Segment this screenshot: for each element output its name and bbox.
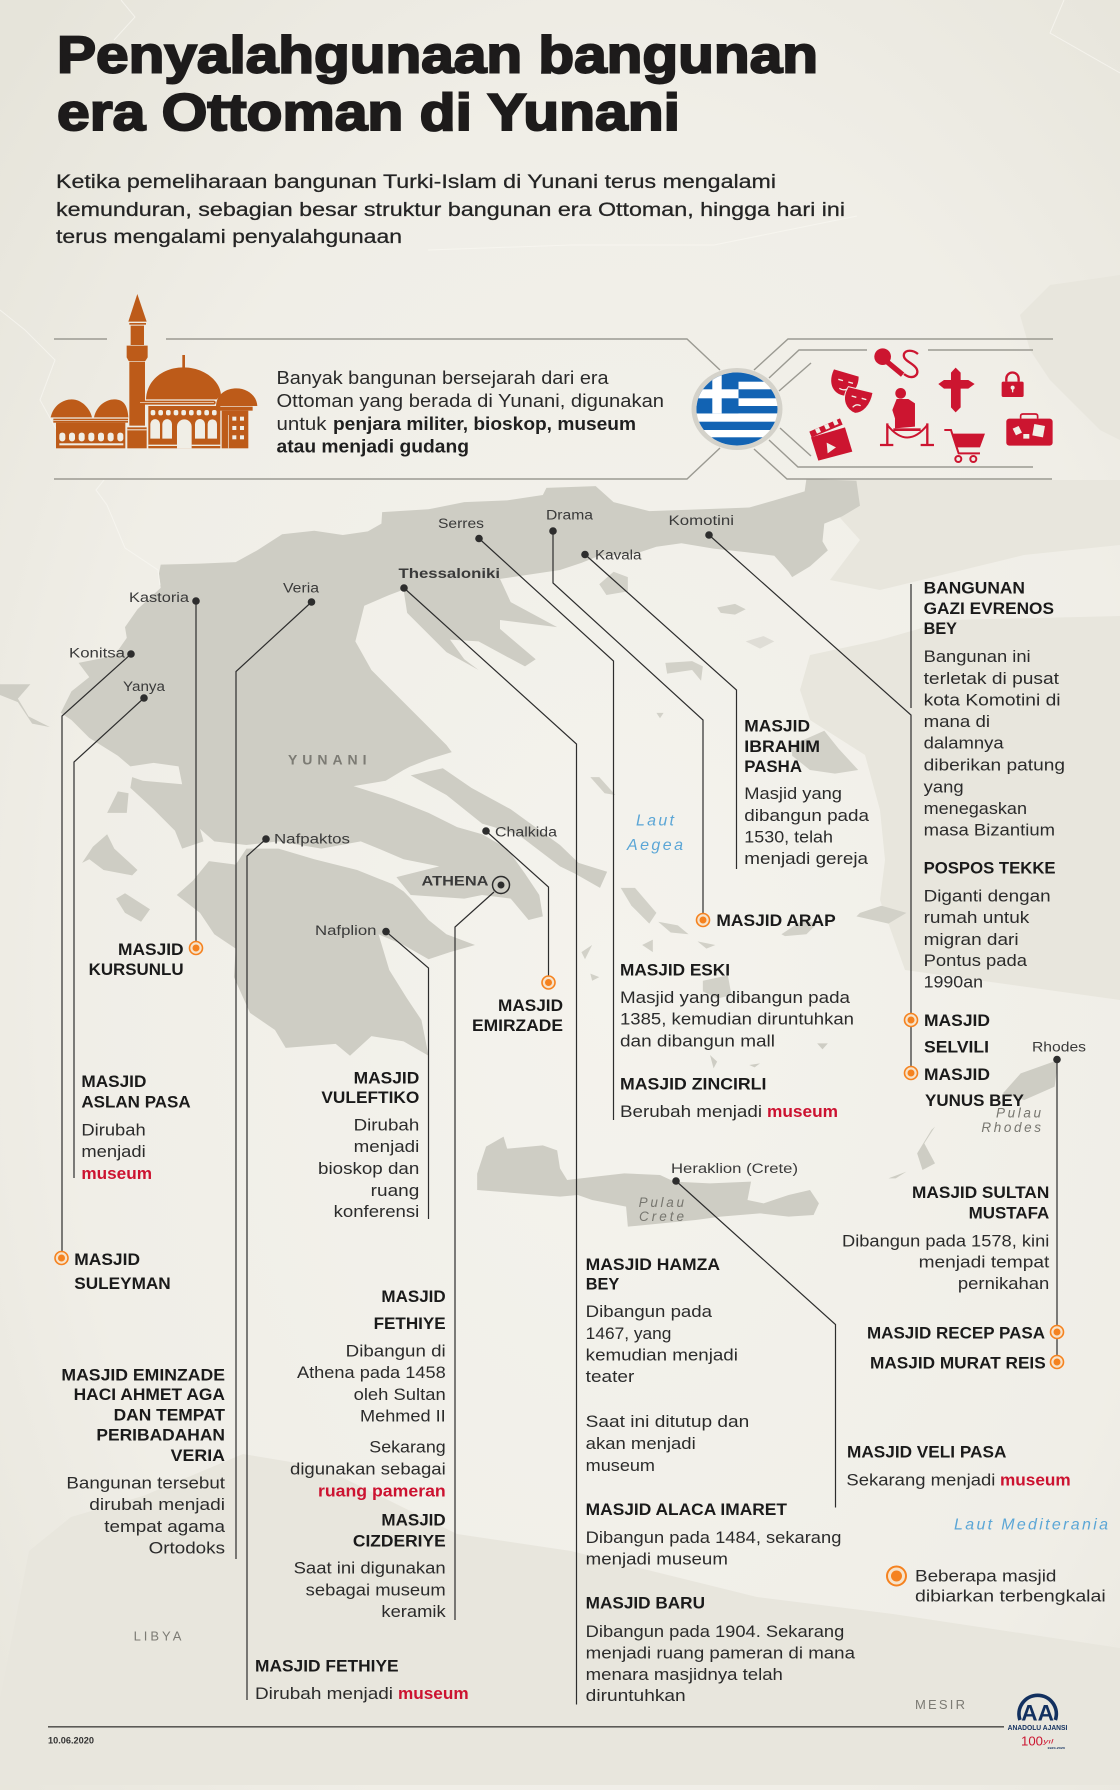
- text: Masjid Vuleftiko: ruang: [371, 1181, 419, 1200]
- text: Masjid Kursunlu: KURSUNLU: [89, 961, 184, 979]
- icon: microphone: [874, 348, 918, 377]
- text: Bangunan Gazi Evrenos Bey: dalamnya: [924, 734, 1004, 753]
- place names on the map: Yanya: [123, 679, 166, 694]
- text: Bangunan Gazi Evrenos Bey: diberikan patung: [924, 756, 1065, 774]
- intro text block: Ottoman yang berada di Yunani, digunakan: [276, 391, 664, 411]
- text: Masjid Veli Pasa: MASJID VELI PASA: [847, 1444, 1006, 1462]
- place names on the map: Nafpaktos: [274, 832, 350, 847]
- sea labels: Laut Mediterania: [954, 1516, 1108, 1534]
- text: Masjid Cizderiye: MASJID: [381, 1512, 446, 1530]
- text: Masjid Suleyman: [74, 1251, 171, 1293]
- text: Masjid Veli Pasa: museum: [1000, 1470, 1071, 1489]
- icon: theatre masks: [831, 369, 873, 413]
- text: Bangunan Gazi Evrenos Bey: mana di: [924, 712, 990, 731]
- text: Pospos Tekke: Pontus pada: [924, 951, 1028, 970]
- icons: misuse of buildings: [809, 348, 1053, 462]
- legend: neglected mosques: dibiarkan terbengkalai: [915, 1586, 1106, 1606]
- text: Masjid Zincirli: [620, 1076, 838, 1121]
- text: Masjid Eminzade: tempat agama: [104, 1517, 226, 1536]
- place names on the map: Nafplion: [315, 923, 376, 938]
- text: Masjid Fethiye Athena: Athena pada 1458: [297, 1363, 446, 1382]
- leader lines and city markers: [62, 527, 1061, 1705]
- text: Masjid Suleyman: SULEYMAN: [74, 1275, 171, 1293]
- text: Masjid Vuleftiko: menjadi: [354, 1137, 419, 1156]
- text: Masjid Hamza Bey: Saat ini ditutup dan: [586, 1412, 749, 1431]
- leader: Kastoria: [192, 597, 200, 948]
- text: Masjid Hamza Bey: [586, 1256, 749, 1475]
- leader: Chalkida: [482, 827, 548, 982]
- leader: Komotini: [705, 531, 911, 1073]
- place names on the map: Rhodes: [981, 1120, 1041, 1135]
- text: Bangunan Gazi Evrenos Bey: BEY: [924, 620, 957, 638]
- logo: Anadolu Ajansi: ANADOLU AJANSI: [1008, 1725, 1067, 1732]
- place names on the map: Kastoria: [129, 590, 190, 605]
- map: mainland Greece and western islands: [0, 479, 860, 1056]
- text: Masjid Vuleftiko: Dirubah: [354, 1115, 419, 1134]
- text: Masjid Sultan Mustafa: [842, 1184, 1050, 1293]
- text: Masjid Veli Pasa: [846, 1444, 1071, 1489]
- icon: shopping cart: [944, 430, 985, 462]
- footer rule and date: 10.06.2020: [48, 1736, 94, 1746]
- text: Masjid Alaca Imaret: [586, 1501, 841, 1568]
- text: Masjid Ibrahim Pasha: [744, 717, 870, 868]
- logo: Anadolu Ajansi: AA: [1021, 1700, 1054, 1725]
- text: Masjid Eski: MASJID ESKI: [620, 962, 730, 980]
- map: Crete, Rhodes and Dodecanese: [477, 1043, 1058, 1227]
- text: Masjid Fethiye Athena: Sekarang: [369, 1438, 446, 1456]
- leader: Rhodes: [1053, 1056, 1061, 1362]
- intro text block: Banyak bangunan bersejarah dari era: [276, 368, 610, 388]
- place names on the map: Heraklion (Crete): [671, 1161, 798, 1176]
- text: Masjid Hamza Bey: kemudian menjadi: [586, 1345, 738, 1364]
- intro text block: atau menjadi gudang: [276, 437, 469, 457]
- title: era Ottoman di Yunani: [57, 84, 680, 142]
- text: Masjid Veli Pasa: Sekarang menjadi: [846, 1470, 995, 1489]
- sea labels: Aegea: [626, 837, 683, 854]
- legend: neglected mosques: [887, 1566, 1106, 1606]
- text: Masjid Hamza Bey: 1467, yang: [586, 1324, 671, 1343]
- text: Masjid Zincirli: MASJID ZINCIRLI: [620, 1076, 766, 1094]
- text: Masjid Recep Pasa: MASJID RECEP PASA: [867, 1324, 1045, 1342]
- text: Pospos Tekke: Diganti dengan: [924, 886, 1051, 905]
- icon: clapperboard: [809, 418, 852, 461]
- text: Masjid Ibrahim Pasha: menjadi gereja: [744, 849, 869, 868]
- text: Masjid Fethiye Veria: Dirubah menjadi: [255, 1684, 393, 1703]
- text: Bangunan Gazi Evrenos Bey: BANGUNAN: [924, 580, 1025, 598]
- text: Masjid Hamza Bey: Dibangun pada: [586, 1302, 713, 1321]
- text: Masjid Fethiye Athena: Mehmed II: [360, 1406, 446, 1425]
- leader: Nafpaktos: [247, 835, 270, 1700]
- leader: Yanya: [74, 694, 148, 1178]
- text: Masjid Selvili: SELVILI: [924, 1038, 989, 1056]
- text: Masjid Cizderiye: CIZDERIYE: [353, 1532, 446, 1550]
- text: Pospos Tekke: migran dari: [924, 930, 1019, 949]
- leader: Nafplion: [382, 928, 428, 1219]
- subtitle text block: terus mengalami penyalahgunaan: [56, 227, 402, 248]
- place names on the map: Serres: [438, 516, 484, 531]
- title: [57, 26, 818, 142]
- map: Aegean islands: [581, 572, 906, 999]
- text: Masjid Baru: [586, 1595, 856, 1705]
- place names on the map: Pulau: [996, 1106, 1041, 1121]
- icon: cross: [938, 368, 975, 412]
- text: Masjid Selvili: MASJID: [924, 1012, 990, 1030]
- text: Masjid Vuleftiko: konferensi: [334, 1202, 419, 1221]
- text: Masjid Alaca Imaret: menjadi museum: [586, 1549, 728, 1568]
- place names on the map: Drama: [546, 508, 594, 522]
- text: Masjid Emirzade: [472, 997, 563, 1035]
- text: Masjid Cizderiye: [294, 1512, 446, 1621]
- text: Masjid Sultan Mustafa: MASJID SULTAN: [912, 1184, 1049, 1202]
- subtitle text block: kemunduran, sebagian besar struktur bangunan era Ottoman, hingga hari ini: [56, 200, 845, 221]
- text: Masjid Eminzade: Bangunan tersebut: [66, 1474, 225, 1493]
- place names on the map: Crete: [639, 1209, 684, 1224]
- logo: Anadolu Ajansi: 1920-2020: [1047, 1746, 1065, 1750]
- text: Masjid Baru: menara masjidnya telah: [586, 1665, 783, 1684]
- text: Masjid Eminzade: dirubah menjadi: [89, 1495, 225, 1514]
- place names on the map: ATHENA: [422, 872, 488, 888]
- text: Masjid Fethiye Athena: [290, 1288, 446, 1500]
- text: Masjid Baru: MASJID BARU: [586, 1595, 705, 1613]
- intro text block: untuk: [276, 414, 328, 434]
- text: Masjid Emirzade: EMIRZADE: [472, 1017, 563, 1035]
- text: Bangunan Gazi Evrenos Bey: terletak di pusat: [924, 669, 1059, 688]
- place names on the map: Pulau: [639, 1195, 684, 1210]
- text: Masjid Aslan Pasa: ASLAN PASA: [81, 1094, 191, 1112]
- text: Bangunan Gazi Evrenos Bey: [924, 580, 1065, 839]
- text: Masjid Fethiye Athena: FETHIYE: [374, 1315, 446, 1333]
- text: Pospos Tekke: [924, 860, 1056, 992]
- intro text block: penjara militer, bioskop, museum: [333, 414, 636, 434]
- place names on the map: Kavala: [595, 548, 642, 562]
- leader: Serres: [475, 535, 614, 1120]
- text: Masjid Hamza Bey: MASJID HAMZA: [586, 1256, 720, 1274]
- text: Masjid Yunus Bey: MASJID: [924, 1066, 990, 1084]
- place names on the map: YUNANI: [288, 752, 366, 768]
- text: Masjid Ibrahim Pasha: IBRAHIM: [744, 738, 820, 756]
- place names on the map: Thessaloniki: [398, 565, 500, 581]
- title: Penyalahgunaan bangunan: [57, 26, 818, 84]
- leader: Drama: [549, 527, 703, 920]
- text: Masjid Ibrahim Pasha: MASJID: [744, 717, 810, 735]
- text: Masjid Fethiye Athena: ruang pameran: [318, 1481, 446, 1500]
- place names on the map: Chalkida: [495, 824, 558, 839]
- text: Masjid Aslan Pasa: menjadi: [81, 1142, 146, 1161]
- icon: statue behind rope: [880, 388, 934, 445]
- text: Masjid Vuleftiko: [318, 1070, 419, 1221]
- place names on the map: Rhodes: [1032, 1040, 1086, 1054]
- text: Masjid Fethiye Veria: museum: [398, 1684, 469, 1703]
- text: Bangunan Gazi Evrenos Bey: yang: [924, 777, 964, 796]
- place names on the map: [69, 508, 1086, 1712]
- text: Bangunan Gazi Evrenos Bey: masa Bizantium: [924, 820, 1055, 839]
- icon: Greek flag: [690, 368, 785, 450]
- text: Masjid Fethiye Athena: digunakan sebagai: [290, 1459, 446, 1478]
- text: Pospos Tekke: 1990an: [924, 973, 983, 992]
- text: Masjid Eminzade: HACI AHMET AGA: [74, 1386, 225, 1404]
- text: Masjid Zincirli: Berubah menjadi: [620, 1102, 762, 1121]
- logo: Anadolu Ajansi: yıl: [1042, 1739, 1054, 1745]
- text: Masjid Vuleftiko: MASJID: [354, 1070, 419, 1088]
- text: Pospos Tekke: POSPOS TEKKE: [924, 860, 1056, 878]
- text: Masjid Zincirli: museum: [767, 1102, 838, 1121]
- text: Masjid Sultan Mustafa: pernikahan: [958, 1274, 1049, 1293]
- text: Pospos Tekke: rumah untuk: [924, 908, 1030, 927]
- panel frame lines: [54, 339, 1053, 479]
- text: Masjid Baru: Dibangun pada 1904. Sekarang: [586, 1622, 844, 1641]
- place names on the map: Konitsa: [69, 646, 126, 661]
- text: Masjid Eminzade: VERIA: [171, 1447, 225, 1465]
- text: Masjid Eminzade: Ortodoks: [149, 1538, 225, 1558]
- text: Masjid Kursunlu: [89, 941, 184, 979]
- text: Masjid Fethiye Athena: Dibangun di: [346, 1342, 446, 1360]
- sea labels: Laut: [636, 812, 675, 830]
- text: Masjid Hamza Bey: akan menjadi: [586, 1434, 696, 1453]
- text: Masjid Cizderiye: Saat ini digunakan: [294, 1559, 446, 1578]
- text: Masjid Vuleftiko: VULEFTIKO: [321, 1089, 419, 1107]
- legend: neglected mosques: Beberapa masjid: [915, 1566, 1056, 1585]
- text: Bangunan Gazi Evrenos Bey: Bangunan ini: [924, 647, 1031, 666]
- icon: padlock: [1002, 372, 1024, 397]
- intro text block: [276, 368, 664, 457]
- text: Masjid Aslan Pasa: MASJID: [81, 1073, 146, 1091]
- panel: intro band with mosque, text, flag and usage icons: [51, 294, 1053, 479]
- text: Masjid Hamza Bey: BEY: [586, 1276, 619, 1294]
- orange markers: neglected mosques: [55, 914, 1064, 1368]
- sea labels: [626, 812, 1108, 1534]
- text: Masjid Selvili: [924, 1012, 990, 1056]
- leader: Athena: [455, 876, 510, 1620]
- text: Masjid Kursunlu: MASJID: [118, 941, 184, 959]
- text: Masjid Eminzade: PERIBADAHAN: [96, 1427, 225, 1445]
- text: Masjid Eski: Masjid yang dibangun pada: [620, 988, 851, 1007]
- text: Bangunan Gazi Evrenos Bey: kota Komotini di: [924, 690, 1061, 709]
- text: Bangunan Gazi Evrenos Bey: GAZI EVRENOS: [924, 600, 1054, 618]
- text: Masjid Ibrahim Pasha: Masjid yang: [744, 784, 842, 803]
- text: Masjid Suleyman: MASJID: [74, 1251, 140, 1269]
- text: Masjid Baru: diruntuhkan: [586, 1686, 686, 1705]
- text: Masjid Ibrahim Pasha: 1530, telah: [744, 828, 833, 846]
- text: Masjid Sultan Mustafa: MUSTAFA: [969, 1204, 1049, 1222]
- place names on the map: Komotini: [668, 513, 734, 528]
- text: Masjid Eminzade: MASJID EMINZADE: [61, 1366, 225, 1384]
- text: Masjid Hamza Bey: museum: [586, 1456, 655, 1475]
- text: Masjid Fethiye Veria: MASJID FETHIYE: [255, 1657, 399, 1675]
- logo: Anadolu Ajansi: [1008, 1695, 1067, 1750]
- place names on the map: LIBYA: [134, 1628, 182, 1644]
- place names on the map: Veria: [283, 581, 320, 596]
- text: Masjid Fethiye Veria: [255, 1657, 469, 1703]
- subtitle text block: [56, 172, 845, 248]
- leader: Thessaloniki: [400, 584, 576, 1705]
- text: Masjid Sultan Mustafa: Dibangun pada 1578, kini: [842, 1231, 1049, 1250]
- text: Masjid Aslan Pasa: museum: [81, 1164, 152, 1183]
- text: Masjid Aslan Pasa: [81, 1073, 191, 1183]
- text: Masjid Alaca Imaret: Dibangun pada 1484, sekarang: [586, 1528, 841, 1547]
- text: Masjid Eminzade: [61, 1366, 226, 1558]
- icon: mosque: [51, 294, 257, 448]
- text: Masjid Eski: [620, 962, 854, 1051]
- text: Masjid Yunus Bey: [924, 1066, 1024, 1110]
- text: Masjid Ibrahim Pasha: dibangun pada: [744, 806, 870, 825]
- leader: Kavala: [581, 551, 736, 869]
- subtitle text block: Ketika pemeliharaan bangunan Turki-Islam di Yunani terus mengalami: [56, 172, 776, 193]
- text: Masjid Baru: menjadi ruang pameran di mana: [586, 1643, 856, 1662]
- icon: suitcase: [1006, 414, 1053, 446]
- leader: Heraklion: [672, 1177, 836, 1508]
- text: Masjid Arap: MASJID ARAP: [716, 912, 836, 930]
- text: Masjid Sultan Mustafa: menjadi tempat: [919, 1253, 1050, 1272]
- leader: Veria: [236, 598, 315, 1559]
- leader: Konitsa: [62, 650, 135, 1258]
- text: Masjid Hamza Bey: teater: [586, 1367, 635, 1386]
- text: Masjid Fethiye Athena: MASJID: [381, 1288, 446, 1306]
- logo: Anadolu Ajansi: 100: [1021, 1733, 1043, 1748]
- text: Masjid Eski: 1385, kemudian diruntuhkan: [620, 1010, 854, 1029]
- text: Masjid Cizderiye: sebagai museum: [306, 1581, 446, 1600]
- text: Masjid Yunus Bey: YUNUS BEY: [925, 1092, 1024, 1110]
- text: Masjid Murat Reis: MASJID MURAT REIS: [870, 1354, 1046, 1372]
- text: Masjid Cizderiye: keramik: [381, 1602, 446, 1621]
- text: Bangunan Gazi Evrenos Bey: menegaskan: [924, 799, 1027, 818]
- text: Masjid Vuleftiko: bioskop dan: [318, 1159, 419, 1178]
- map: pale country borders: [0, 0, 1120, 585]
- text: Masjid Alaca Imaret: MASJID ALACA IMARET: [586, 1501, 787, 1519]
- text: Masjid Eski: dan dibangun mall: [620, 1032, 775, 1051]
- place names on the map: MESIR: [915, 1697, 965, 1712]
- text: Masjid Aslan Pasa: Dirubah: [81, 1120, 146, 1139]
- text: Masjid Fethiye Athena: oleh Sultan: [354, 1385, 446, 1404]
- text: Masjid Ibrahim Pasha: PASHA: [744, 758, 802, 776]
- text: Masjid Eminzade: DAN TEMPAT: [114, 1406, 225, 1424]
- text: Masjid Emirzade: MASJID: [498, 997, 563, 1015]
